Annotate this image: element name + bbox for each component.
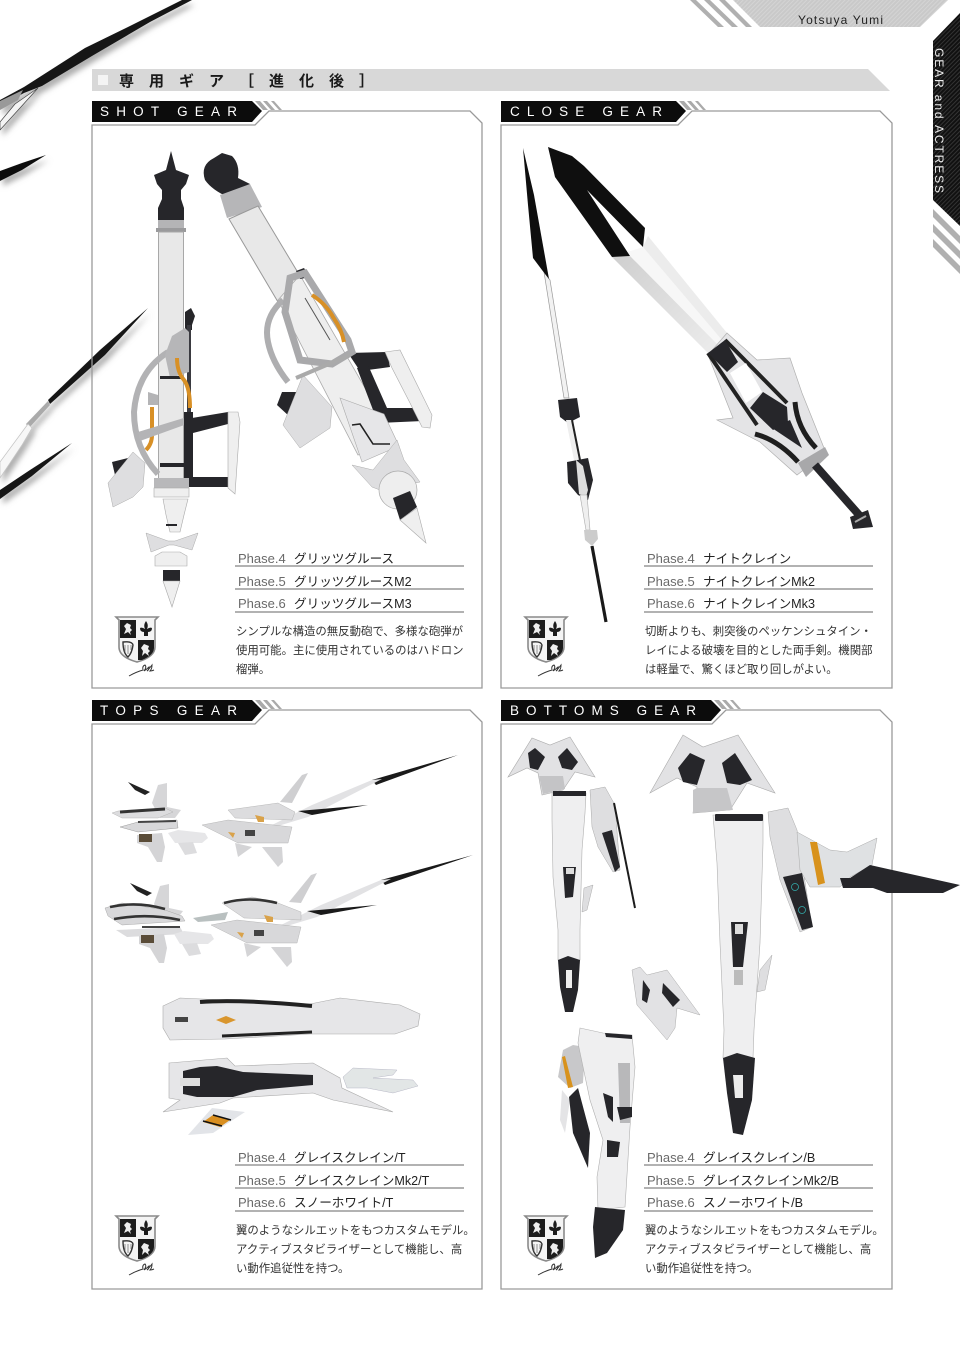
blade: upper left short <box>0 155 46 181</box>
gear: leg, side view <box>558 1028 635 1258</box>
panel frame <box>92 111 482 688</box>
gear: long-wing unit, lower <box>193 855 473 967</box>
panel: shot gear <box>92 101 482 688</box>
header tag: CLOSE GEAR <box>510 104 662 119</box>
section title: 専用ギア［進化後］ <box>119 72 389 90</box>
gear: thin sword, side view <box>523 148 606 622</box>
phase list: Phase.5 <box>238 1173 286 1188</box>
phase list: ナイトクレインMk3 <box>703 597 815 611</box>
phase list: Phase.4 <box>647 551 695 566</box>
phase list <box>644 1150 873 1211</box>
description: 榴弾。 <box>236 663 270 676</box>
background blades at the left margin <box>0 0 192 499</box>
blade: middle left long <box>0 308 148 478</box>
description: 切断よりも、刺突後のペッケンシュタイン・ <box>645 624 872 638</box>
gear: arm, back view <box>163 998 420 1040</box>
description: アクティブスタビライザーとして機能し、高 <box>645 1242 871 1256</box>
description: 翼のようなシルエットをもつカスタムモデル。 <box>236 1223 475 1237</box>
phase list: グレイスクレインMk2/B <box>703 1174 839 1188</box>
header tag <box>501 700 741 721</box>
phase list: Phase.5 <box>238 574 286 589</box>
description: アクティブスタビライザーとして機能し、高 <box>236 1242 462 1256</box>
header tag <box>92 700 282 721</box>
phase list: グリッツグルースM3 <box>294 597 412 611</box>
author name: Yotsuya Yumi <box>798 13 883 27</box>
crest <box>525 1216 567 1275</box>
phase list: Phase.4 <box>647 1150 695 1165</box>
phase list: Phase.5 <box>647 574 695 589</box>
gear: great sword <box>548 147 873 529</box>
gear: small unit, upper <box>112 782 208 862</box>
header tag <box>501 101 706 122</box>
description: 翼のようなシルエットをもつカスタムモデル。 <box>645 1223 884 1237</box>
description: 使用可能。主に使用されているのはハドロン <box>236 643 463 657</box>
phase list: Phase.6 <box>647 596 695 611</box>
description: い動作追従性を持つ。 <box>236 1261 349 1275</box>
crest <box>525 617 567 676</box>
gear: long-wing unit, upper <box>202 755 458 867</box>
gear: arm, front view <box>163 1058 418 1135</box>
phase list: グリッツグルース <box>294 552 394 566</box>
phase list: スノーホワイト/T <box>294 1196 394 1210</box>
panel frame <box>501 111 892 688</box>
panel: tops gear <box>92 700 482 1289</box>
phase list: Phase.5 <box>647 1173 695 1188</box>
description: い動作追従性を持つ。 <box>645 1261 758 1275</box>
crest <box>116 617 158 676</box>
panel: bottoms gear <box>501 700 960 1289</box>
gear: leg, large front view <box>650 735 960 1135</box>
phase list: Phase.4 <box>238 551 286 566</box>
header tag: SHOT GEAR <box>100 104 237 119</box>
phase list: スノーホワイト/B <box>703 1196 803 1210</box>
phase list: グレイスクレイン/T <box>294 1151 406 1165</box>
blade: top left long <box>0 0 192 130</box>
phase list <box>235 1150 464 1211</box>
gear: vertical launcher <box>108 151 240 607</box>
phase list: グリッツグルースM2 <box>294 575 412 589</box>
phase list: Phase.6 <box>647 1195 695 1210</box>
panel frame <box>92 710 482 1289</box>
gear: small unit, lower <box>105 883 214 963</box>
phase list: グレイスクレインMk2/T <box>294 1174 430 1188</box>
side tab text: GEAR and ACTRESS <box>932 48 946 193</box>
panel frame <box>501 710 892 1289</box>
header tag <box>92 101 282 122</box>
side tab: GEAR and ACTRESS <box>932 13 960 274</box>
gear: angled launcher <box>204 153 432 543</box>
phase list: Phase.6 <box>238 596 286 611</box>
section title band <box>92 69 890 91</box>
crest <box>116 1216 158 1275</box>
header tag: BOTTOMS GEAR <box>510 703 696 718</box>
gear: small thruster unit <box>632 967 700 1040</box>
description: レイによる破壊を目的とした両手剣。機関部 <box>645 643 872 657</box>
phase list <box>644 551 873 612</box>
panel: close gear <box>501 101 892 688</box>
phase list <box>235 551 464 612</box>
phase list: Phase.6 <box>238 1195 286 1210</box>
description: は軽量で、驚くほど取り回しがよい。 <box>645 662 838 676</box>
phase list: Phase.4 <box>238 1150 286 1165</box>
header tag: TOPS GEAR <box>100 703 237 718</box>
decorative header stripes <box>690 0 752 27</box>
phase list: ナイトクレイン <box>703 552 791 566</box>
description: シンプルな構造の無反動砲で、多様な砲弾が <box>236 624 464 638</box>
gear: leg, small front view <box>508 737 635 1012</box>
header stripes and name tab <box>690 0 948 27</box>
blade: lower left <box>0 443 72 499</box>
header band <box>733 0 948 27</box>
phase list: ナイトクレインMk2 <box>703 575 815 589</box>
phase list: グレイスクレイン/B <box>703 1151 815 1165</box>
